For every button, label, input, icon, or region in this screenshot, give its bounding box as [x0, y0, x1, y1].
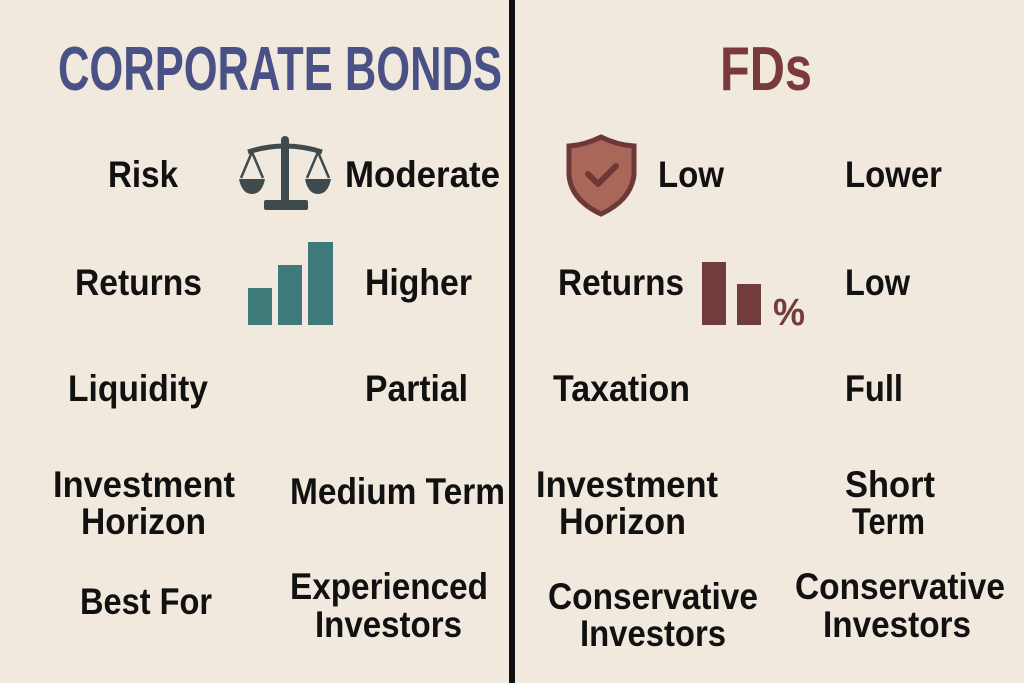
row: best for: Investors	[315, 604, 462, 645]
row: best for: Investors	[823, 604, 971, 645]
row: risk: Moderate	[345, 154, 500, 195]
icon: shield	[569, 137, 634, 214]
row: risk: Low	[658, 154, 724, 195]
row: investment horizon: Short	[845, 464, 935, 505]
title: FDs: FDs	[720, 35, 812, 104]
row: liquidity / taxation: Taxation	[553, 368, 690, 409]
row: best for: Conservative	[548, 576, 758, 617]
row: returns: Higher	[365, 262, 472, 303]
row: returns: Returns	[75, 262, 202, 303]
row: investment horizon: Investment	[536, 464, 718, 505]
row: returns	[75, 242, 910, 334]
row: risk: Risk	[108, 154, 178, 195]
row: investment horizon: Horizon	[559, 501, 686, 542]
row: liquidity / taxation	[68, 368, 903, 409]
row: best for: Conservative	[795, 566, 1005, 607]
icon: falling bars with percent: %	[773, 292, 805, 334]
icon: rising bars	[248, 242, 333, 325]
row: liquidity / taxation: Partial	[365, 368, 468, 409]
row: investment horizon: Investment	[53, 464, 235, 505]
row: best for: Experienced	[290, 566, 488, 607]
row: risk: Lower	[845, 154, 942, 195]
row: investment horizon: Term	[852, 501, 925, 542]
row: returns: Returns	[558, 262, 684, 303]
row: liquidity / taxation: Liquidity	[68, 368, 208, 409]
row: liquidity / taxation: Full	[845, 368, 903, 409]
row: investment horizon: Horizon	[81, 501, 206, 542]
icon: falling bars with percent	[702, 262, 805, 334]
row: investment horizon: Medium Term	[290, 471, 505, 512]
row: investment horizon	[53, 464, 935, 542]
row: risk	[108, 136, 942, 214]
icon: scale	[239, 136, 331, 210]
row: best for: Best For	[80, 581, 212, 622]
title: corporate bonds: CORPORATE BONDS	[58, 35, 502, 104]
row: best for: Investors	[580, 613, 726, 654]
row: best for	[80, 566, 1005, 654]
row: returns: Low	[845, 262, 910, 303]
